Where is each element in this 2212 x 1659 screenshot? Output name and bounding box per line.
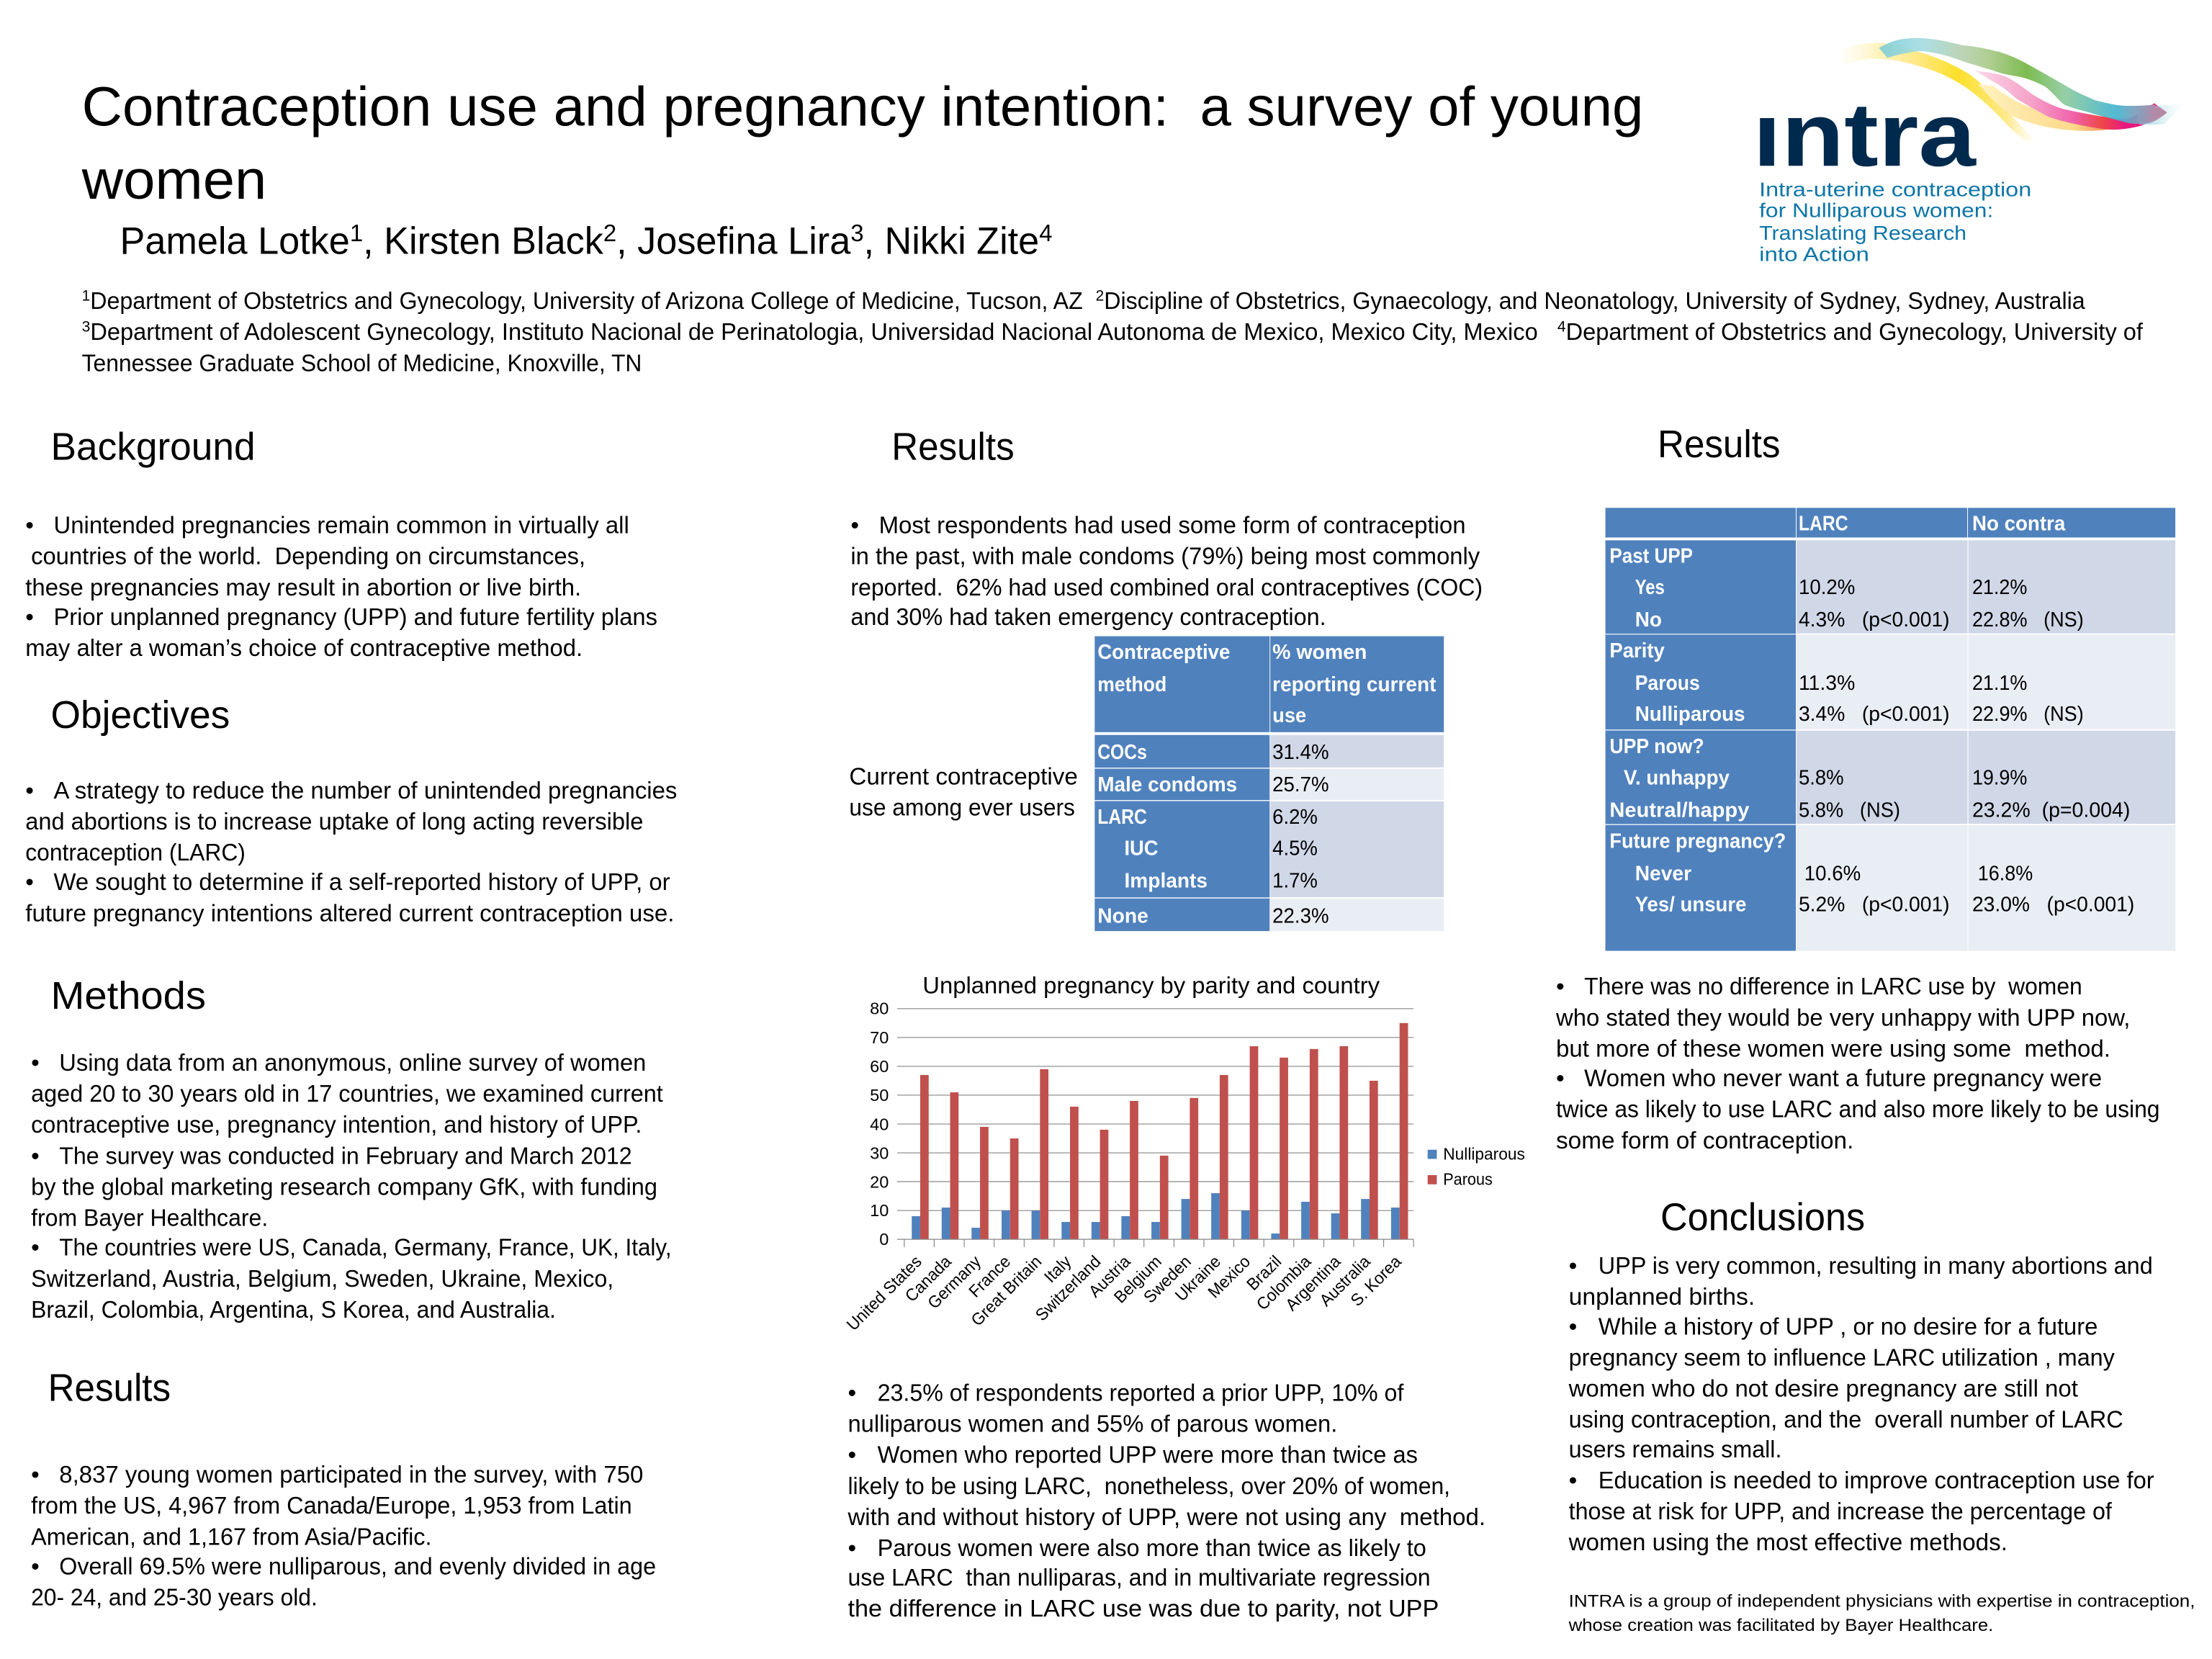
- text: methods bullets: [31, 1050, 672, 1323]
- table: current contraceptive use: use: [1272, 704, 1306, 727]
- table: LARC and no contraception use: No contra: [1972, 513, 2066, 536]
- text: conclusions bullets: Education is needed to improve contraception use for: [1599, 1467, 2154, 1494]
- text: objectives bullets: •: [25, 869, 34, 896]
- authors: , Nikki Zite: [864, 220, 1039, 263]
- table: current contraceptive use: Implants: [1124, 869, 1208, 892]
- text: objectives bullets: •: [25, 778, 34, 804]
- x axis country labels: Argentina: [1282, 1251, 1344, 1314]
- y axis labels: 40: [870, 1115, 889, 1133]
- text: LARC difference bullets: [1555, 974, 2160, 1154]
- table: LARC and no contraception use: No: [1635, 608, 1662, 631]
- table: LARC and no contraception use: Yes: [1635, 576, 1665, 599]
- table: current contraceptive use: 25.7%: [1272, 773, 1329, 796]
- table: current contraceptive use: Male condoms: [1097, 773, 1237, 796]
- text: participants bullets: [31, 1462, 656, 1611]
- footnote: about INTRA: [1568, 1592, 2195, 1635]
- logo: INTRA: [1749, 38, 2185, 265]
- x axis country labels: Austria: [1084, 1251, 1134, 1301]
- affiliations: 1: [82, 286, 90, 304]
- authors: 3: [850, 220, 864, 247]
- text: table caption: Current contraceptive: [849, 763, 1078, 790]
- x axis country labels: United States: [842, 1251, 925, 1334]
- text: objectives bullets: A strategy to reduce the number of unintended pregnancies: [53, 778, 677, 804]
- affiliations: Tennessee Graduate School of Medicine, Knoxville, TN: [82, 350, 642, 377]
- footnote: about INTRA: INTRA is a group of independent physicians with expertise in contraception,: [1569, 1592, 2195, 1611]
- table: LARC and no contraception use: LARC: [1799, 513, 1848, 536]
- table: LARC and no contraception use: 23.2% (p=0.004): [1972, 799, 2130, 822]
- text: contraception history: Most respondents had used some form of contraception: [879, 513, 1466, 539]
- table: LARC and no contraception use: 4.3% (p<0.001): [1799, 608, 1950, 631]
- table: LARC and no contraception use: Neutral/happy: [1609, 799, 1749, 822]
- text: objectives bullets: and abortions is to increase uptake of long acting reversible: [25, 809, 643, 835]
- text: conclusions bullets: pregnancy seem to influence LARC utilization , many: [1569, 1344, 2115, 1371]
- legend: Parous: [1443, 1170, 1493, 1189]
- title: women: [81, 149, 266, 211]
- text: table caption: [849, 763, 1078, 821]
- table: LARC and no contraception use: 5.8%: [1799, 766, 1844, 789]
- table: LARC and no contraception use: Past UPP: [1609, 545, 1693, 568]
- y axis labels: 60: [870, 1057, 889, 1076]
- x axis country labels: Great Britain: [967, 1251, 1045, 1330]
- footnote: about INTRA: whose creation was facilitated by Bayer Healthcare.: [1568, 1616, 1993, 1635]
- text: background bullets: Prior unplanned pregnancy (UPP) and future fertility plans: [53, 604, 657, 631]
- y axis labels: 10: [870, 1201, 889, 1220]
- text: UPP results bullets: •: [848, 1380, 856, 1406]
- affiliations: Discipline of Obstetrics, Gynaecology, and Neonatology, University of Sydney, Sydney, Australia: [1104, 288, 2085, 315]
- text: UPP results bullets: [847, 1380, 1485, 1622]
- text: participants bullets: •: [31, 1462, 40, 1488]
- table: current contraceptive use: COCs: [1097, 741, 1147, 764]
- text: participants bullets: American, and 1,167 from Asia/Pacific.: [31, 1524, 432, 1550]
- text: UPP results bullets: likely to be using LARC, nonetheless, over 20% of women,: [848, 1473, 1450, 1500]
- text: objectives bullets: contraception (LARC): [25, 840, 246, 866]
- table: LARC and no contraception use: Never: [1635, 863, 1691, 886]
- title: [81, 76, 1643, 211]
- table: LARC and no contraception use: 21.1%: [1972, 672, 2027, 695]
- legend: [1428, 1144, 1525, 1189]
- affiliations: 4: [1557, 317, 1566, 335]
- text: conclusions bullets: •: [1569, 1313, 1577, 1340]
- table: current contraceptive use: 4.5%: [1272, 837, 1318, 860]
- text: methods bullets: •: [31, 1235, 40, 1262]
- text: UPP results bullets: use LARC than nulliparas, and in multivariate regression: [848, 1565, 1431, 1591]
- text: background bullets: [25, 513, 657, 662]
- text: methods bullets: Switzerland, Austria, Belgium, Sweden, Ukraine, Mexico,: [31, 1266, 613, 1292]
- text: LARC difference bullets: twice as likely to use LARC and also more likely to be using: [1556, 1097, 2160, 1123]
- text: UPP results bullets: 23.5% of respondents reported a prior UPP, 10% of: [878, 1380, 1404, 1406]
- text: participants bullets: 8,837 young women participated in the survey, with 750: [59, 1462, 643, 1488]
- y axis labels: 80: [870, 999, 889, 1018]
- panel: conclusions: [1568, 1195, 2154, 1556]
- authors: 4: [1039, 220, 1053, 247]
- text: UPP results bullets: with and without history of UPP, were not using any method.: [847, 1504, 1485, 1531]
- text: objectives bullets: We sought to determine if a self-reported history of UPP, or: [53, 869, 670, 896]
- text: UPP results bullets: Women who reported UPP were more than twice as: [878, 1442, 1418, 1469]
- text: participants bullets: Overall 69.5% were nulliparous, and evenly divided in age: [59, 1553, 656, 1580]
- text: methods bullets: The countries were US, Canada, Germany, France, UK, Italy,: [59, 1235, 672, 1262]
- authors: , Josefina Lira: [616, 220, 851, 263]
- authors: , Kirsten Black: [363, 220, 603, 263]
- x axis country labels: [842, 1251, 1405, 1334]
- table: LARC and no contraception use: 22.9% (NS): [1972, 703, 2084, 726]
- text: contraception history: and 30% had taken emergency contraception.: [850, 604, 1326, 631]
- panel: background: [25, 426, 657, 662]
- text: conclusions bullets: unplanned births.: [1569, 1284, 1755, 1310]
- table: LARC and no contraception use: Yes/ unsure: [1635, 894, 1746, 917]
- authors: 1: [350, 220, 363, 247]
- table: current contraceptive use: reporting current: [1272, 673, 1437, 696]
- text: conclusions bullets: using contraception, and the overall number of LARC: [1569, 1407, 2123, 1434]
- text: LARC difference bullets: but more of these women were using some method.: [1556, 1035, 2110, 1062]
- x axis country labels: Switzerland: [1032, 1251, 1105, 1325]
- text: conclusions bullets: [1568, 1253, 2154, 1556]
- text: contraception history: in the past, with male condoms (79%) being most commonly: [850, 544, 1480, 570]
- y axis labels: 70: [870, 1028, 889, 1047]
- text: methods bullets: from Bayer Healthcare.: [31, 1205, 268, 1232]
- x axis country labels: France: [965, 1251, 1014, 1301]
- affiliations: Department of Obstetrics and Gynecology, University of: [1566, 319, 2144, 346]
- table: current contraceptive use: % women: [1272, 641, 1367, 664]
- table: LARC and no contraception use: 22.8% (NS): [1972, 608, 2084, 631]
- affiliations: Department of Adolescent Gynecology, Instituto Nacional de Perinatologia, Universidad Nacional Autonoma de Mexico, Mexico City, Mexico: [90, 319, 1557, 346]
- table: current contraceptive use: Contraceptive: [1097, 641, 1230, 664]
- text: background bullets: •: [25, 604, 34, 631]
- x axis country labels: Brazil: [1243, 1251, 1285, 1294]
- text: LARC difference bullets: Women who never want a future pregnancy were: [1584, 1066, 2102, 1092]
- table: LARC and no contraception use: UPP now?: [1609, 735, 1704, 758]
- heading: results left: Results: [48, 1366, 171, 1409]
- text: participants bullets: from the US, 4,967 from Canada/Europe, 1,953 from Latin: [31, 1493, 632, 1519]
- series: parous: [920, 1023, 1408, 1239]
- heading: methods: Methods: [51, 974, 206, 1017]
- text: contraception history: reported. 62% had used combined oral contraceptives (COC): [850, 575, 1483, 601]
- table: LARC and no contraception use: Parity: [1609, 639, 1665, 662]
- text: background bullets: •: [25, 513, 34, 539]
- x axis country labels: Colombia: [1253, 1251, 1315, 1313]
- text: participants bullets: 20- 24, and 25-30 years old.: [31, 1585, 318, 1611]
- text: methods bullets: by the global marketing research company GfK, with funding: [31, 1174, 657, 1200]
- panel: results middle: [849, 426, 1483, 821]
- text: LARC difference bullets: •: [1556, 974, 1565, 1000]
- text: conclusions bullets: users remains small.: [1569, 1437, 1781, 1463]
- table: current contraceptive use: method: [1097, 673, 1166, 696]
- text: UPP results bullets: nulliparous women and 55% of parous women.: [848, 1411, 1337, 1438]
- text: methods bullets: •: [31, 1143, 40, 1169]
- table: LARC and no contraception use: 19.9%: [1972, 766, 2027, 789]
- text: conclusions bullets: While a history of UPP , or no desire for a future: [1599, 1313, 2098, 1340]
- table: LARC and no contraception use: 5.2% (p<0.001): [1799, 894, 1950, 917]
- x axis country labels: S. Korea: [1346, 1251, 1405, 1310]
- table: LARC and no contraception use: 10.6%: [1804, 863, 1861, 886]
- heading: conclusions: Conclusions: [1660, 1195, 1865, 1238]
- legend: Nulliparous: [1443, 1144, 1525, 1163]
- tagline: for Nulliparous women:: [1759, 199, 1993, 222]
- affiliations: 2: [1096, 286, 1104, 304]
- panel: objectives: [25, 693, 677, 927]
- table: LARC and no contraception use: [1606, 508, 2175, 950]
- table: LARC and no contraception use: 16.8%: [1978, 863, 2033, 886]
- text: methods bullets: Brazil, Colombia, Argentina, S Korea, and Australia.: [31, 1297, 556, 1323]
- authors: 2: [603, 220, 616, 247]
- text: LARC difference bullets: some form of contraception.: [1556, 1128, 1853, 1154]
- x axis country labels: Belgium: [1110, 1251, 1165, 1307]
- bar chart: unplanned pregnancy by parity and country: [842, 972, 1525, 1334]
- text: methods bullets: contraceptive use, pregnancy intention, and history of UPP.: [31, 1112, 642, 1138]
- text: background bullets: may alter a woman’s choice of contraceptive method.: [25, 635, 583, 662]
- x axis country labels: Ukraine: [1172, 1251, 1224, 1305]
- table: LARC and no contraception use: Nulliparous: [1635, 703, 1745, 726]
- series: nulliparous: [912, 1193, 1400, 1239]
- text: methods bullets: The survey was conducted in February and March 2012: [59, 1143, 632, 1169]
- text: objectives bullets: [25, 778, 677, 927]
- tagline: Intra-uterine contraception: [1759, 178, 2031, 200]
- text: background bullets: Unintended pregnancies remain common in virtually all: [53, 513, 629, 539]
- table: LARC and no contraception use: 3.4% (p<0.001): [1799, 703, 1950, 726]
- table: LARC and no contraception use: 11.3%: [1799, 672, 1855, 695]
- table: current contraceptive use: IUC: [1124, 837, 1158, 860]
- text: background bullets: these pregnancies may result in abortion or live birth.: [25, 575, 581, 601]
- y axis labels: 50: [870, 1086, 889, 1105]
- tagline: into Action: [1759, 243, 1869, 265]
- table: LARC and no contraception use: V. unhappy: [1624, 766, 1730, 789]
- x axis country labels: Italy: [1040, 1251, 1075, 1286]
- affiliations: [82, 286, 2144, 377]
- text: conclusions bullets: •: [1569, 1253, 1577, 1280]
- table: LARC and no contraception use: Parous: [1635, 672, 1700, 695]
- text: conclusions bullets: UPP is very common, resulting in many abortions and: [1599, 1253, 2153, 1280]
- text: methods bullets: Using data from an anonymous, online survey of women: [59, 1050, 646, 1076]
- table: current contraceptive use: 31.4%: [1272, 741, 1329, 764]
- text: UPP results bullets: the difference in LARC use was due to parity, not UPP: [848, 1596, 1439, 1622]
- text: methods bullets: •: [31, 1050, 40, 1076]
- table: current contraceptive use: LARC: [1097, 806, 1147, 829]
- wordmark: intra: intra: [1753, 84, 1977, 185]
- heading: results middle: Results: [891, 426, 1015, 469]
- table: current contraceptive use: 6.2%: [1272, 806, 1318, 829]
- y axis labels: 0: [879, 1230, 889, 1249]
- table: LARC and no contraception use: Future pregnancy?: [1609, 830, 1786, 853]
- y axis labels: 20: [870, 1173, 889, 1192]
- tagline: Translating Research: [1759, 222, 1966, 244]
- heading: results right: Results: [1658, 423, 1780, 466]
- text: LARC difference bullets: •: [1556, 1066, 1565, 1092]
- text: background bullets: countries of the world. Depending on circumstances,: [31, 544, 585, 570]
- title: Contraception use and pregnancy intention: a survey of young: [82, 76, 1643, 138]
- x axis country labels: Australia: [1316, 1251, 1374, 1310]
- text: objectives bullets: future pregnancy intentions altered current contraception use.: [25, 900, 674, 927]
- authors: Pamela Lotke: [120, 220, 353, 263]
- tagline: [1759, 178, 2031, 265]
- x axis country labels: Mexico: [1204, 1251, 1254, 1302]
- table: LARC and no contraception use: 5.8% (NS): [1799, 799, 1900, 822]
- text: conclusions bullets: those at risk for UPP, and increase the percentage of: [1569, 1498, 2113, 1525]
- x axis country labels: Germany: [924, 1251, 985, 1313]
- affiliations: Department of Obstetrics and Gynecology, University of Arizona College of Medicine, Tucson, AZ: [90, 288, 1096, 315]
- icon: ribbons: [1841, 38, 2185, 142]
- x axis country labels: Canada: [901, 1251, 955, 1305]
- table: LARC and no contraception use: 23.0% (p<0.001): [1972, 894, 2134, 917]
- panel: results left: [31, 1366, 656, 1611]
- affiliations: 3: [82, 317, 90, 335]
- text: LARC difference bullets: who stated they would be very unhappy with UPP now,: [1555, 1004, 2130, 1031]
- text: contraception history: •: [850, 513, 859, 539]
- text: table caption: use among ever users: [849, 794, 1075, 821]
- heading: objectives: Objectives: [51, 693, 230, 737]
- table: LARC and no contraception use: 10.2%: [1799, 576, 1855, 599]
- text: conclusions bullets: •: [1569, 1467, 1577, 1494]
- chart title: Unplanned pregnancy by parity and country: [922, 972, 1380, 998]
- panel: methods: [31, 974, 672, 1323]
- text: UPP results bullets: •: [848, 1535, 856, 1562]
- text: LARC difference bullets: There was no difference in LARC use by women: [1584, 974, 2082, 1000]
- x axis country labels: Sweden: [1140, 1251, 1195, 1307]
- text: UPP results bullets: •: [848, 1442, 856, 1469]
- text: contraception history: [850, 513, 1483, 631]
- y axis labels: [870, 999, 889, 1249]
- table: current contraceptive use: None: [1097, 904, 1148, 927]
- text: methods bullets: aged 20 to 30 years old in 17 countries, we examined current: [31, 1081, 663, 1107]
- table: current contraceptive use: 22.3%: [1272, 904, 1329, 927]
- table: LARC and no contraception use: 21.2%: [1972, 576, 2027, 599]
- heading: background: Background: [51, 426, 256, 469]
- table: current contraceptive use: [1094, 637, 1444, 931]
- text: conclusions bullets: women who do not desire pregnancy are still not: [1568, 1376, 2078, 1403]
- text: UPP results bullets: Parous women were also more than twice as likely to: [878, 1535, 1426, 1562]
- text: conclusions bullets: women using the most effective methods.: [1568, 1529, 2008, 1556]
- table: current contraceptive use: 1.7%: [1272, 869, 1318, 892]
- y axis labels: 30: [870, 1143, 889, 1162]
- text: participants bullets: •: [31, 1553, 40, 1580]
